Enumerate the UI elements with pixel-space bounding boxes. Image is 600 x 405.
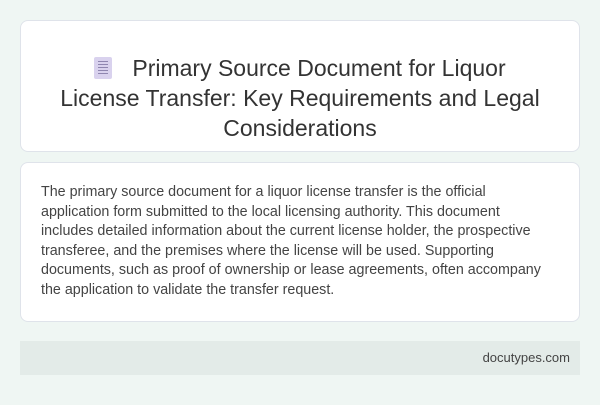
title (60, 55, 540, 141)
text block: the application to validate the transfer request. (41, 282, 334, 298)
footer (20, 341, 580, 375)
text block: The primary source document for a liquor license transfer is the official (41, 184, 486, 200)
icon: document (94, 57, 112, 79)
panel: description (20, 162, 580, 322)
text block: documents, such as proof of ownership or lease agreements, often accompany (41, 262, 541, 278)
text block: includes detailed information about the current license holder, the prospective (41, 223, 531, 239)
title: License Transfer: Key Requirements and Legal (60, 85, 540, 111)
title: Primary Source Document for Liquor (132, 55, 506, 81)
title: Considerations (223, 115, 377, 141)
footer text: docutypes.com (483, 350, 570, 365)
panel: title card (20, 20, 580, 152)
text block (41, 184, 541, 298)
text block: application form submitted to the local licensing authority. This document (41, 204, 500, 220)
text block: transferee, and the premises where the license will be used. Supporting (41, 242, 494, 258)
